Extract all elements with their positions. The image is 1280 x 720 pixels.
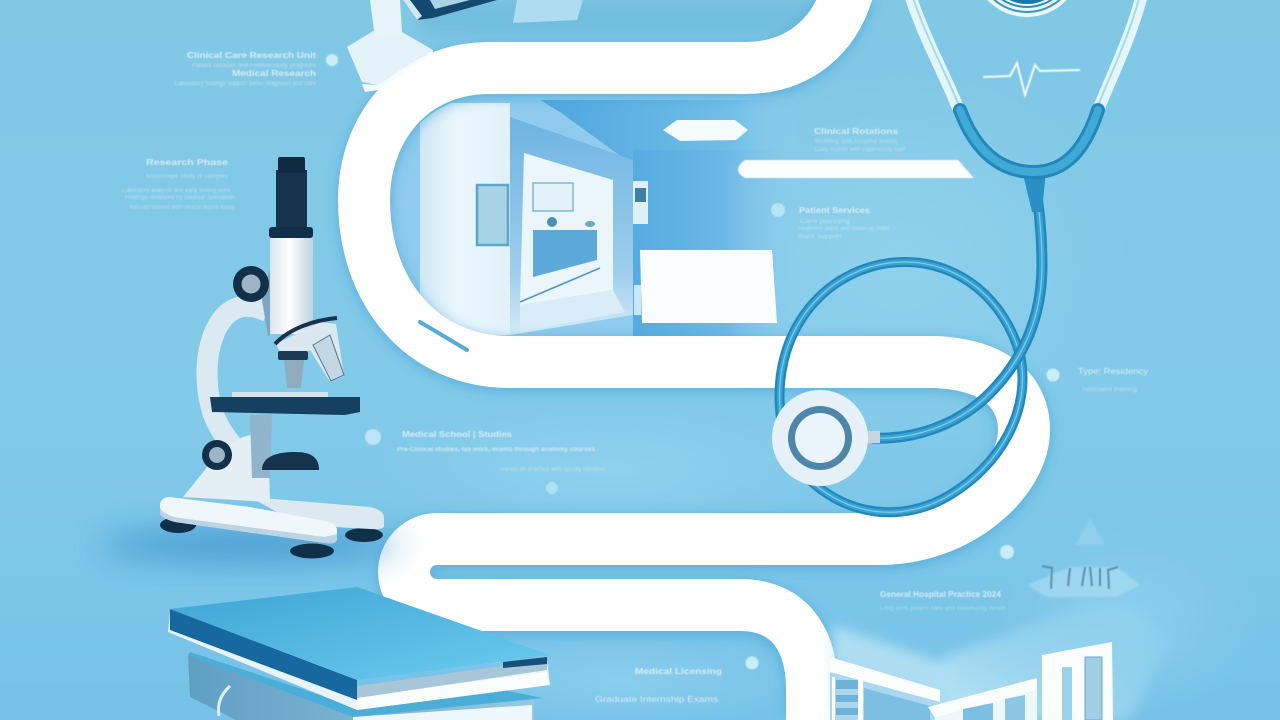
framed picture on wall: [477, 185, 508, 245]
upper book cover: [170, 587, 550, 680]
text block: center note: Hands-on practice with faculty mentors: [500, 467, 605, 473]
microscope arm: [183, 270, 272, 502]
panel: hospital room scene: [390, 95, 777, 336]
text block: bottom note: [595, 667, 722, 704]
text block: middle right note: [797, 206, 889, 240]
text block: top left: [175, 51, 317, 87]
text block: upper right note: [814, 127, 905, 153]
door wall picture: [533, 183, 573, 211]
heartbeat line: [983, 63, 1080, 95]
text block: middle right note: Ward support: [797, 234, 842, 240]
text block: far right note: Specialist training: [1082, 387, 1137, 393]
door frame: [510, 117, 633, 335]
chest piece: [772, 390, 880, 486]
text block: bottom note: Graduate Internship Exams: [595, 695, 718, 704]
microscope stage: [210, 392, 360, 415]
microscope nosepiece: [275, 318, 344, 388]
text block: microscope note: Findings reviewed by medical specialists: [125, 195, 235, 201]
text block: upper right note: Working with hospital teams: [815, 139, 897, 145]
text block: top left: Patient services and medical study programs: [192, 63, 316, 69]
ear tubes: [910, 0, 1142, 108]
text block: hospital note: Long term patient care and community health: [880, 606, 1006, 612]
door interior: [520, 153, 613, 305]
ceiling lamp: [663, 120, 748, 141]
upper book spine: [170, 609, 357, 700]
marker dots: [326, 54, 1060, 670]
text block: microscope note: Laboratory analysis and early testing work: [122, 188, 231, 194]
icon: lab equipment at top: [347, 0, 583, 92]
text block: center note: Medical School | Studies: [402, 430, 513, 439]
microscope shadow: [100, 529, 400, 561]
text block: top left: Medical Research: [232, 69, 316, 78]
back wall: [633, 150, 761, 336]
microscope lamp: [262, 452, 319, 470]
icon: stack of books: [168, 587, 550, 720]
text block: center note: [397, 430, 605, 473]
upper book pages: [168, 612, 550, 710]
text block: far right note: [1078, 367, 1148, 393]
lower book: [188, 652, 543, 720]
ceiling: [540, 100, 761, 160]
left wing: [830, 657, 940, 720]
text block: middle right note: Patient Services: [799, 206, 871, 215]
yoke: [960, 110, 1098, 212]
text block: microscope note: Microscope study of samples: [146, 174, 228, 180]
microscope eyepiece: [269, 157, 313, 334]
right tower: [1042, 642, 1113, 720]
microscope feet: [160, 517, 383, 558]
white bed: [640, 250, 777, 323]
stem tube: [872, 178, 1042, 438]
text block: hospital note: General Hospital Practice 2024: [880, 590, 1002, 599]
white winding ribbon path: [364, 0, 1024, 720]
left white wall: [420, 103, 510, 335]
text block: bottom note: Medical Licensing: [635, 667, 722, 676]
text block: far right note: Type: Residency: [1078, 367, 1148, 376]
text block: middle right note: Care planning: [800, 219, 850, 225]
light bar: [738, 160, 974, 178]
icon: hospital building: [830, 597, 1170, 720]
tube loop: [780, 262, 1023, 512]
icon: faint building emblem: [1027, 518, 1140, 597]
counter: [533, 230, 597, 277]
text block: upper right note: Clinical Rotations: [814, 127, 899, 136]
icon: stethoscope: [772, 0, 1142, 512]
text block: upper right note: Daily rounds with supervising staff: [815, 147, 905, 153]
text block: center note: Pre-Clinical studies, lab work, exams through anatomy courses: [397, 447, 596, 453]
top chest ring: [972, 0, 1082, 17]
text block: microscope note: Results shared with clinical teams today: [130, 205, 235, 211]
text block: microscope note: Research Phase: [146, 158, 229, 167]
icon: microscope: [100, 157, 400, 561]
text block: hospital note: [880, 590, 1006, 612]
text block: microscope note: [122, 158, 235, 211]
text block: top left: Laboratory findings support better diagnosis and care: [175, 81, 317, 87]
wall sign: [633, 181, 648, 224]
microscope knobs: [202, 266, 269, 470]
middle wing: [928, 678, 1037, 720]
microscope base: [160, 497, 384, 543]
text block: middle right note: Treatment plans and follow-up visits: [797, 226, 889, 232]
text block: top left: Clinical Care Research Unit: [187, 51, 316, 60]
